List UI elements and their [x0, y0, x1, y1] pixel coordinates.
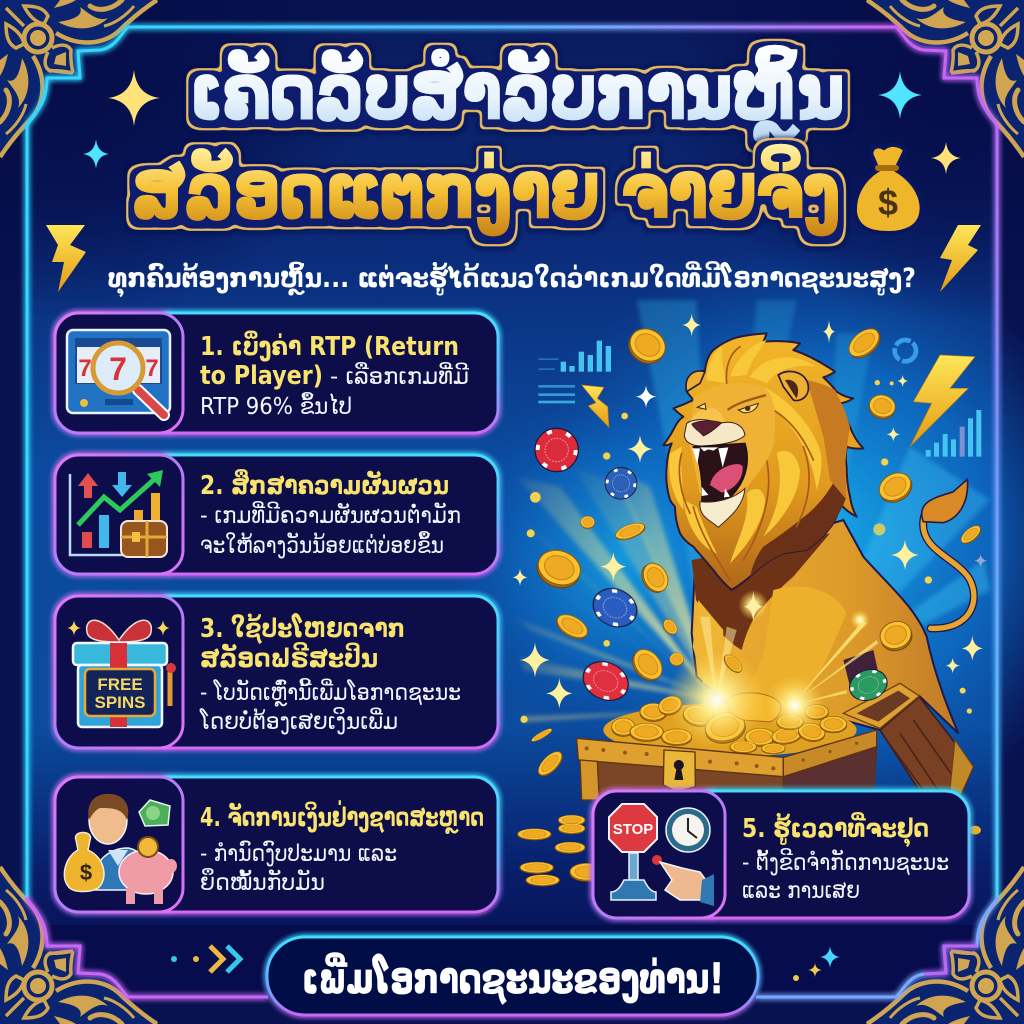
tip 1 text: - ເລືອກເກມທີ່ມີ — [330, 361, 469, 390]
lid strap — [950, 740, 973, 797]
chest shadow fur — [692, 533, 830, 650]
brow — [728, 395, 765, 409]
tip 5 text — [742, 811, 949, 904]
chest rivets — [585, 742, 858, 770]
icon: person with money and piggy bank — [64, 794, 177, 904]
tip 4 text: 4. ຈັດການເງິນຢ່າງຊາດສະຫຼາດ — [200, 799, 484, 834]
lion body — [692, 520, 958, 733]
icon: money bag: $ — [878, 182, 898, 223]
subtitle: ທຸກຄົນຕ້ອງການຫຼິ້ນ... ແຕ່ຈະຮູ້ໄດ້ແນວໃດວ່າເກມໃດທີ່ມີໂອກາດຊະນະສູງ? — [108, 261, 916, 298]
panel background — [55, 313, 498, 433]
stacked coins — [518, 815, 981, 886]
icon: free spins gift box: FREE — [97, 675, 143, 694]
tip 3 text: ສລັອດຟຣີສະປິນ — [200, 641, 378, 674]
icon: money bag — [855, 145, 922, 233]
ornament top right — [867, 0, 1024, 157]
illustration: lion bursting from treasure chest — [513, 300, 990, 800]
data charts — [538, 341, 981, 457]
tip 2 text: - ເກມທີ່ມີຄວາມຜັນຜວນຕ່ຳມັກ — [200, 500, 461, 529]
title sparkles — [83, 70, 961, 174]
chin beard — [700, 488, 745, 527]
panel: tip 2 — [55, 455, 498, 574]
dark back mane — [750, 477, 847, 577]
panel background — [55, 596, 498, 748]
icon: slot machine with magnifier: 7 — [78, 355, 92, 382]
tip 2 text — [200, 467, 461, 559]
icon: free spins gift box: SPINS — [94, 693, 146, 712]
icon: slot machine with magnifier — [67, 330, 170, 415]
glow dots — [520, 380, 972, 723]
tip 2 text: ຈະໃຫ້ລາງວັນນ້ອຍແຕ່ບ່ອຍຂຶ້ນ — [200, 530, 444, 559]
inner ear — [785, 380, 798, 398]
tip 4 text: ຍຶດໝັ້ນກັບມັນ — [200, 867, 325, 896]
tip 3 text: - ໂບນັດເຫຼົ່ານີ້ເພີ່ມໂອກາດຊະນະ — [200, 677, 461, 706]
sparkles — [513, 314, 987, 709]
ornament bottom left — [0, 867, 157, 1024]
tip 5 text: - ຕັ້ງຂີດຈຳກັດການຊະນະ — [742, 847, 949, 876]
title — [132, 45, 844, 235]
tail tuft — [922, 479, 968, 523]
icon: stop sign, clock and hand: STOP — [613, 821, 653, 838]
tip 3 text: 3. ໃຊ້ປະໂຫຍດຈາກ — [200, 612, 405, 645]
panel: tip 5 — [593, 791, 969, 918]
icon: slot machine with magnifier: 7 — [145, 355, 159, 382]
icon: person with money and piggy bank: $ — [80, 860, 92, 885]
icon: stop sign, clock and hand — [609, 804, 714, 906]
tip 1 text: RTP 96% ຂຶ້ນໄປ — [200, 391, 352, 420]
ring chart — [895, 340, 916, 361]
snout bridge — [689, 408, 725, 422]
lid planks — [887, 720, 953, 793]
call to action text: ເພີ່ມໂອກາດຊະນະຂອງທ່ານ! — [302, 952, 724, 1005]
tip 2 text: 2. ສຶກສາຄວາມຜັນຜວນ — [200, 467, 449, 501]
ornament top left — [0, 0, 157, 157]
paw — [728, 693, 781, 722]
tip 4 text: - ກຳນົດງົບປະມານ ແລະ — [200, 840, 397, 867]
icon: lightning right — [940, 225, 981, 292]
coin pile — [612, 693, 847, 754]
ornament bottom right — [867, 867, 1024, 1024]
lion head — [663, 333, 863, 590]
lid rim — [843, 683, 919, 728]
burst glow — [667, 590, 878, 750]
teeth — [692, 447, 730, 497]
tip 5 text: ແລະ ການເສຍ — [742, 878, 860, 904]
eye right — [738, 403, 758, 413]
arrows decoration — [171, 946, 240, 972]
icon: free spins gift box — [67, 620, 176, 727]
muzzle — [684, 420, 745, 446]
chest lid back — [880, 697, 973, 797]
icon: lightning left — [46, 225, 86, 292]
mane shadow strands — [679, 347, 813, 580]
tip 5 text: 5. ຮູ້ເວລາທີ່ຈະຢຸດ — [742, 811, 929, 848]
tip 3 text: ໂດຍບໍ່ຕ້ອງເສຍເງິນເພີ່ມ — [199, 706, 398, 735]
icon: chart and chest — [70, 470, 167, 557]
pill background — [267, 937, 758, 1015]
panel background — [55, 455, 498, 574]
leg gap shadow — [843, 650, 880, 687]
light rays — [513, 300, 990, 722]
title line 1: ເຄັດລັບສຳລັບການຫຼິ້ນ — [190, 45, 844, 142]
call to action pill — [267, 937, 758, 1015]
lid inner — [857, 691, 910, 722]
tip 4 text — [200, 799, 484, 896]
panel background — [593, 791, 969, 918]
tail — [923, 517, 974, 628]
ear left — [686, 371, 705, 392]
mane — [663, 333, 863, 590]
panel: tip 4 — [55, 777, 498, 912]
tip 1 text: to Player) — [200, 361, 323, 391]
eye left — [697, 403, 706, 409]
tip 1 text — [200, 329, 469, 420]
front leg — [693, 600, 723, 693]
panel: tip 3 — [55, 596, 498, 748]
icon: slot machine with magnifier: 7 — [109, 351, 127, 387]
tongue — [710, 464, 743, 493]
keyhole — [674, 760, 684, 780]
panel background — [55, 777, 498, 912]
tip 1 text: 1. ເບິ່ງຄ່າ RTP (Return — [200, 329, 459, 362]
front leg right — [730, 587, 847, 713]
flying coins — [530, 322, 984, 780]
sparkles decoration — [793, 946, 840, 981]
nose — [692, 421, 722, 436]
chest interior pile base — [603, 703, 857, 757]
chest front — [577, 730, 877, 800]
mouth — [693, 443, 747, 502]
lightning bolts — [582, 355, 975, 447]
ear right — [778, 371, 808, 401]
face — [690, 383, 775, 493]
tip 3 text — [199, 612, 461, 735]
bright mane locks — [669, 340, 821, 563]
panel: tip 1 — [55, 313, 498, 433]
poker chips — [535, 428, 891, 707]
title line 2: ສລັອດແຕກງ່າຍ ຈ່າຍຈິງ — [132, 144, 840, 235]
